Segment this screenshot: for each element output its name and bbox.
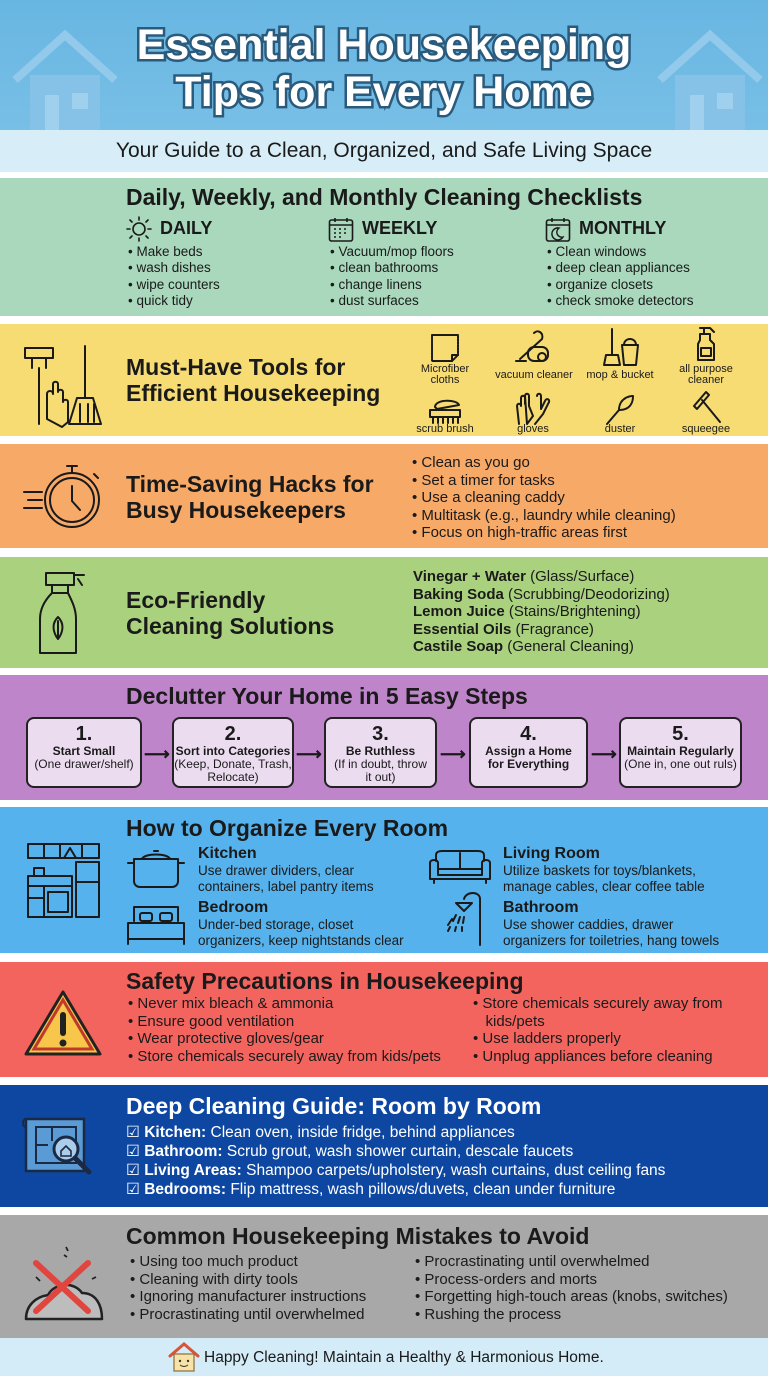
- heading: [126, 354, 380, 406]
- icon: spray bottle leaf: [39, 572, 85, 654]
- hacks list: [412, 454, 676, 541]
- panel: declutter: [0, 675, 768, 800]
- title: [137, 21, 631, 118]
- living room: manage cables, clear coffee table: [503, 879, 705, 894]
- checklist: ☑ Bedrooms: Flip mattress, wash pillows/duvets, clean under furniture: [126, 1181, 615, 1198]
- step 4: for Everything: [488, 757, 569, 771]
- subtitle: [0, 130, 768, 172]
- step 5: 5.: [672, 723, 689, 745]
- step 3: [324, 717, 437, 788]
- heading: [126, 471, 374, 523]
- weekly column: [328, 218, 454, 308]
- living room: Utilize baskets for toys/blankets,: [503, 863, 696, 878]
- panel: checklists: • deep clean appliances: [547, 260, 690, 275]
- panel: checklists: • wash dishes: [128, 260, 211, 275]
- tools grid: cleaner: [688, 374, 724, 386]
- solutions list: Essential Oils (Fragrance): [413, 620, 594, 638]
- mistakes list left: • Procrastinating until overwhelmed: [130, 1306, 365, 1322]
- heading: Time-Saving Hacks for: [126, 471, 374, 497]
- bedroom: Under-bed storage, closet: [198, 917, 353, 932]
- checklist: ☑ Living Areas: Shampoo carpets/upholstery, wash curtains, dust ceiling fans: [126, 1162, 665, 1179]
- step 3: it out): [365, 770, 396, 784]
- step 2: 2.: [225, 723, 241, 745]
- title: Essential Housekeeping: [137, 21, 631, 69]
- step 5: [619, 717, 742, 788]
- heading: [126, 587, 334, 639]
- tools grid: mop & bucket: [586, 369, 654, 381]
- bedroom: [127, 899, 404, 948]
- panel: checklists: • Vacuum/mop floors: [330, 244, 454, 259]
- tools grid: gloves: [517, 423, 549, 435]
- icon: house left: [12, 30, 118, 130]
- panel: deep cleaning: [0, 1085, 768, 1207]
- step 4: Assign a Home: [485, 744, 572, 758]
- panel: checklists: • change linens: [330, 277, 422, 292]
- safety list right: [473, 995, 722, 1064]
- title: Tips for Every Home: [175, 68, 593, 116]
- footer text: Happy Cleaning! Maintain a Healthy & Harmonious Home.: [204, 1349, 604, 1366]
- heading: Cleaning Solutions: [126, 613, 334, 639]
- safety list left: • Ensure good ventilation: [128, 1012, 294, 1030]
- bathroom: [447, 892, 719, 948]
- heading: Safety Precautions in Housekeeping: [126, 968, 524, 994]
- icon: stopwatch: [23, 465, 100, 528]
- arrow: ⟶: [591, 744, 617, 764]
- panel: time-saving hacks: [0, 444, 768, 548]
- arrow: ⟶: [296, 744, 322, 764]
- tools grid: cloths: [431, 374, 459, 386]
- subtitle: Your Guide to a Clean, Organized, and Safe Living Space: [116, 139, 652, 162]
- safety list right: kids/pets: [486, 1012, 545, 1030]
- heading: Daily, Weekly, and Monthly Cleaning Checklists: [126, 184, 642, 210]
- icon: warning triangle: [24, 990, 102, 1056]
- mistakes list left: • Ignoring manufacturer instructions: [130, 1288, 366, 1305]
- tools grid: Microfiber: [421, 363, 469, 375]
- icon: blueprint with magnifier: [22, 1118, 92, 1174]
- solutions list: [413, 568, 670, 655]
- mistakes list right: • Forgetting high-touch areas (knobs, switches): [415, 1288, 728, 1305]
- panel: checklists: MONTHLY: [579, 218, 666, 238]
- panel: checklists: • check smoke detectors: [547, 293, 694, 308]
- checklist: ☑ Bathroom: Scrub grout, wash shower curtain, descale faucets: [126, 1143, 573, 1160]
- footer: [0, 1338, 768, 1376]
- panel: checklists: • Clean windows: [547, 244, 646, 259]
- daily column: [126, 216, 220, 308]
- bedroom: organizers, keep nightstands clear: [198, 933, 404, 948]
- icon: smiling house: [168, 1342, 200, 1372]
- mistakes list right: • Procrastinating until overwhelmed: [415, 1253, 650, 1270]
- panel: checklists: • wipe counters: [128, 277, 220, 292]
- bathroom: Bathroom: [503, 899, 579, 916]
- solutions list: Castile Soap (General Cleaning): [413, 638, 634, 655]
- heading: Efficient Housekeeping: [126, 380, 380, 406]
- mistakes list left: • Cleaning with dirty tools: [130, 1270, 298, 1288]
- kitchen: containers, label pantry items: [198, 879, 374, 894]
- step 3: (If in doubt, throw: [334, 757, 427, 771]
- panel: eco-friendly: [0, 557, 768, 668]
- tools grid: [416, 327, 733, 435]
- checklist: ☑ Kitchen: Clean oven, inside fridge, behind appliances: [126, 1124, 515, 1141]
- step 2: Sort into Categories: [176, 744, 290, 758]
- panel: organize rooms: [0, 807, 768, 953]
- panel: checklists: [0, 178, 768, 316]
- tools grid: vacuum cleaner: [495, 369, 573, 381]
- step 3: 3.: [372, 723, 389, 745]
- icon: house right: [658, 30, 762, 130]
- step 5: (One in, one out ruls): [624, 757, 737, 771]
- step 1: 1.: [76, 723, 92, 745]
- bathroom: Use shower caddies, drawer: [503, 917, 673, 932]
- heading: Busy Housekeepers: [126, 497, 346, 523]
- safety list right: • Unplug appliances before cleaning: [473, 1048, 713, 1064]
- step 2: [172, 717, 294, 788]
- heading: Common Housekeeping Mistakes to Avoid: [126, 1223, 589, 1249]
- solutions list: Lemon Juice (Stains/Brightening): [413, 603, 641, 620]
- bedroom: Bedroom: [198, 899, 268, 916]
- step 2: (Keep, Donate, Trash,: [174, 757, 292, 771]
- header banner: [0, 0, 768, 130]
- mistakes list right: • Rushing the process: [415, 1306, 561, 1322]
- arrow: ⟶: [144, 744, 170, 764]
- panel: checklists: DAILY: [160, 218, 212, 238]
- icon: dust pile with X: [24, 1246, 104, 1320]
- hacks list: • Multitask (e.g., laundry while cleaning): [412, 506, 676, 524]
- bathroom: organizers for toiletries, hang towels: [503, 933, 719, 948]
- mistakes list left: [130, 1253, 366, 1322]
- heading: Deep Cleaning Guide: Room by Room: [126, 1093, 541, 1119]
- panel: tools: [0, 324, 768, 436]
- kitchen: Use drawer dividers, clear: [198, 863, 354, 878]
- step 4: 4.: [520, 723, 537, 745]
- step 4: [469, 717, 588, 788]
- checklist: [126, 1124, 665, 1198]
- icon: tools: [24, 345, 102, 428]
- panel: mistakes: [0, 1215, 768, 1338]
- tools grid: all purpose: [679, 363, 733, 375]
- heading: Must-Have Tools for: [126, 354, 345, 380]
- living room: Living Room: [503, 845, 600, 862]
- hacks list: • Set a timer for tasks: [412, 472, 555, 488]
- monthly column: [546, 218, 694, 308]
- safety list right: • Use ladders properly: [473, 1030, 621, 1047]
- mistakes list right: • Process-orders and morts: [415, 1270, 597, 1288]
- panel: checklists: • clean bathrooms: [330, 260, 438, 275]
- step 2: Relocate): [207, 770, 259, 784]
- tools grid: scrub brush: [416, 423, 474, 435]
- safety list left: • Store chemicals securely away from kids/pets: [128, 1048, 441, 1064]
- solutions list: Baking Soda (Scrubbing/Deodorizing): [413, 586, 670, 602]
- panel: checklists: • organize closets: [547, 277, 653, 292]
- safety list left: • Never mix bleach & ammonia: [128, 995, 333, 1012]
- heading: How to Organize Every Room: [126, 815, 448, 841]
- tools grid: duster: [605, 423, 635, 435]
- panel: checklists: • dust surfaces: [330, 293, 419, 308]
- mistakes list left: • Using too much product: [130, 1253, 298, 1270]
- hacks list: • Clean as you go: [412, 454, 530, 471]
- hacks list: • Focus on high-traffic areas first: [412, 524, 627, 541]
- step 5: Maintain Regularly: [627, 744, 734, 758]
- living room: [429, 845, 705, 894]
- safety list right: • Store chemicals securely away from: [473, 995, 722, 1012]
- safety list left: • Wear protective gloves/gear: [128, 1030, 324, 1047]
- mistakes list right: [415, 1253, 728, 1322]
- kitchen: Kitchen: [198, 845, 257, 862]
- arrow: ⟶: [440, 744, 466, 764]
- tools grid: squeegee: [682, 423, 730, 435]
- solutions list: Vinegar + Water (Glass/Surface): [413, 568, 634, 585]
- hacks list: • Use a cleaning caddy: [412, 489, 565, 506]
- step 1: Start Small: [53, 744, 115, 758]
- heading: declutter: Declutter Your Home in 5 Easy Steps: [126, 683, 528, 709]
- panel: checklists: • quick tidy: [128, 293, 193, 308]
- panel: checklists: WEEKLY: [362, 218, 437, 238]
- panel: checklists: • Make beds: [128, 244, 203, 259]
- safety list left: [128, 995, 441, 1064]
- kitchen: [127, 845, 374, 894]
- step 1: [26, 717, 142, 788]
- heading: Eco-Friendly: [126, 587, 265, 613]
- panel: safety: [0, 962, 768, 1077]
- icon: kitchen: [27, 843, 100, 918]
- step 3: Be Ruthless: [346, 744, 415, 758]
- step 1: (One drawer/shelf): [34, 757, 134, 771]
